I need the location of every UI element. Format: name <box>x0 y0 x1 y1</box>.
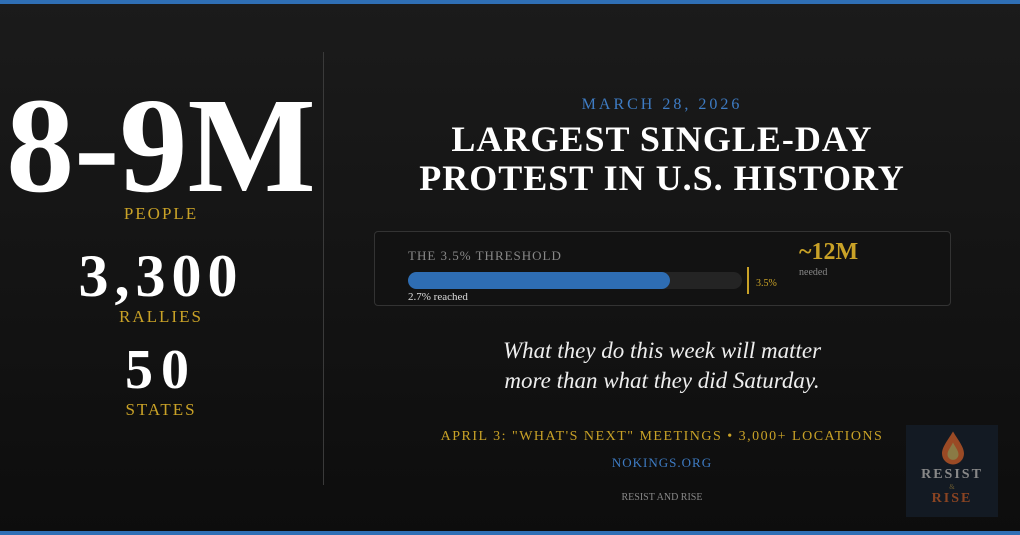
stat: 3,300: 3,300 <box>78 243 244 309</box>
footer: RESIST AND RISE <box>622 492 702 503</box>
title <box>419 119 905 198</box>
logo: resist & rise: RISE <box>932 491 972 506</box>
~12M needed: ~12M <box>799 239 858 265</box>
marker 3.5% <box>747 267 749 294</box>
icon: flame <box>942 432 964 464</box>
callout: april 3: APRIL 3: "WHAT'S NEXT" MEETINGS • 3,000+ LOCATIONS <box>441 429 883 444</box>
panel: threshold progress: 3.5% <box>756 278 777 289</box>
quote: What they do this week will matter <box>503 338 821 363</box>
quote: more than what they did Saturday. <box>504 368 820 393</box>
reached label: 2.7% reached <box>408 291 468 303</box>
threshold heading: THE 3.5% THRESHOLD <box>408 248 562 263</box>
title: LARGEST SINGLE-DAY <box>451 119 873 159</box>
stat: 8-9M: 8-9M <box>6 71 316 221</box>
panel: stats <box>6 71 316 419</box>
panel: threshold progress <box>374 231 951 306</box>
bottom accent bar <box>0 531 1020 535</box>
date: MARCH 28, 2026 <box>582 96 742 113</box>
label: people: PEOPLE <box>124 204 198 223</box>
top accent bar <box>0 0 1020 4</box>
link: nokings.org: NOKINGS.ORG <box>612 455 712 470</box>
panel: threshold progress: needed <box>799 267 827 278</box>
logo: resist & rise: & <box>949 483 955 491</box>
logo: resist & rise: RESIST <box>921 467 983 482</box>
logo: resist & rise <box>906 425 998 517</box>
quote <box>503 338 822 393</box>
stat: 50: 50 <box>125 339 197 401</box>
title: PROTEST IN U.S. HISTORY <box>419 158 905 198</box>
label: rallies: RALLIES <box>119 307 203 326</box>
bar chart: progress <box>408 272 742 289</box>
label: states: STATES <box>125 400 197 419</box>
